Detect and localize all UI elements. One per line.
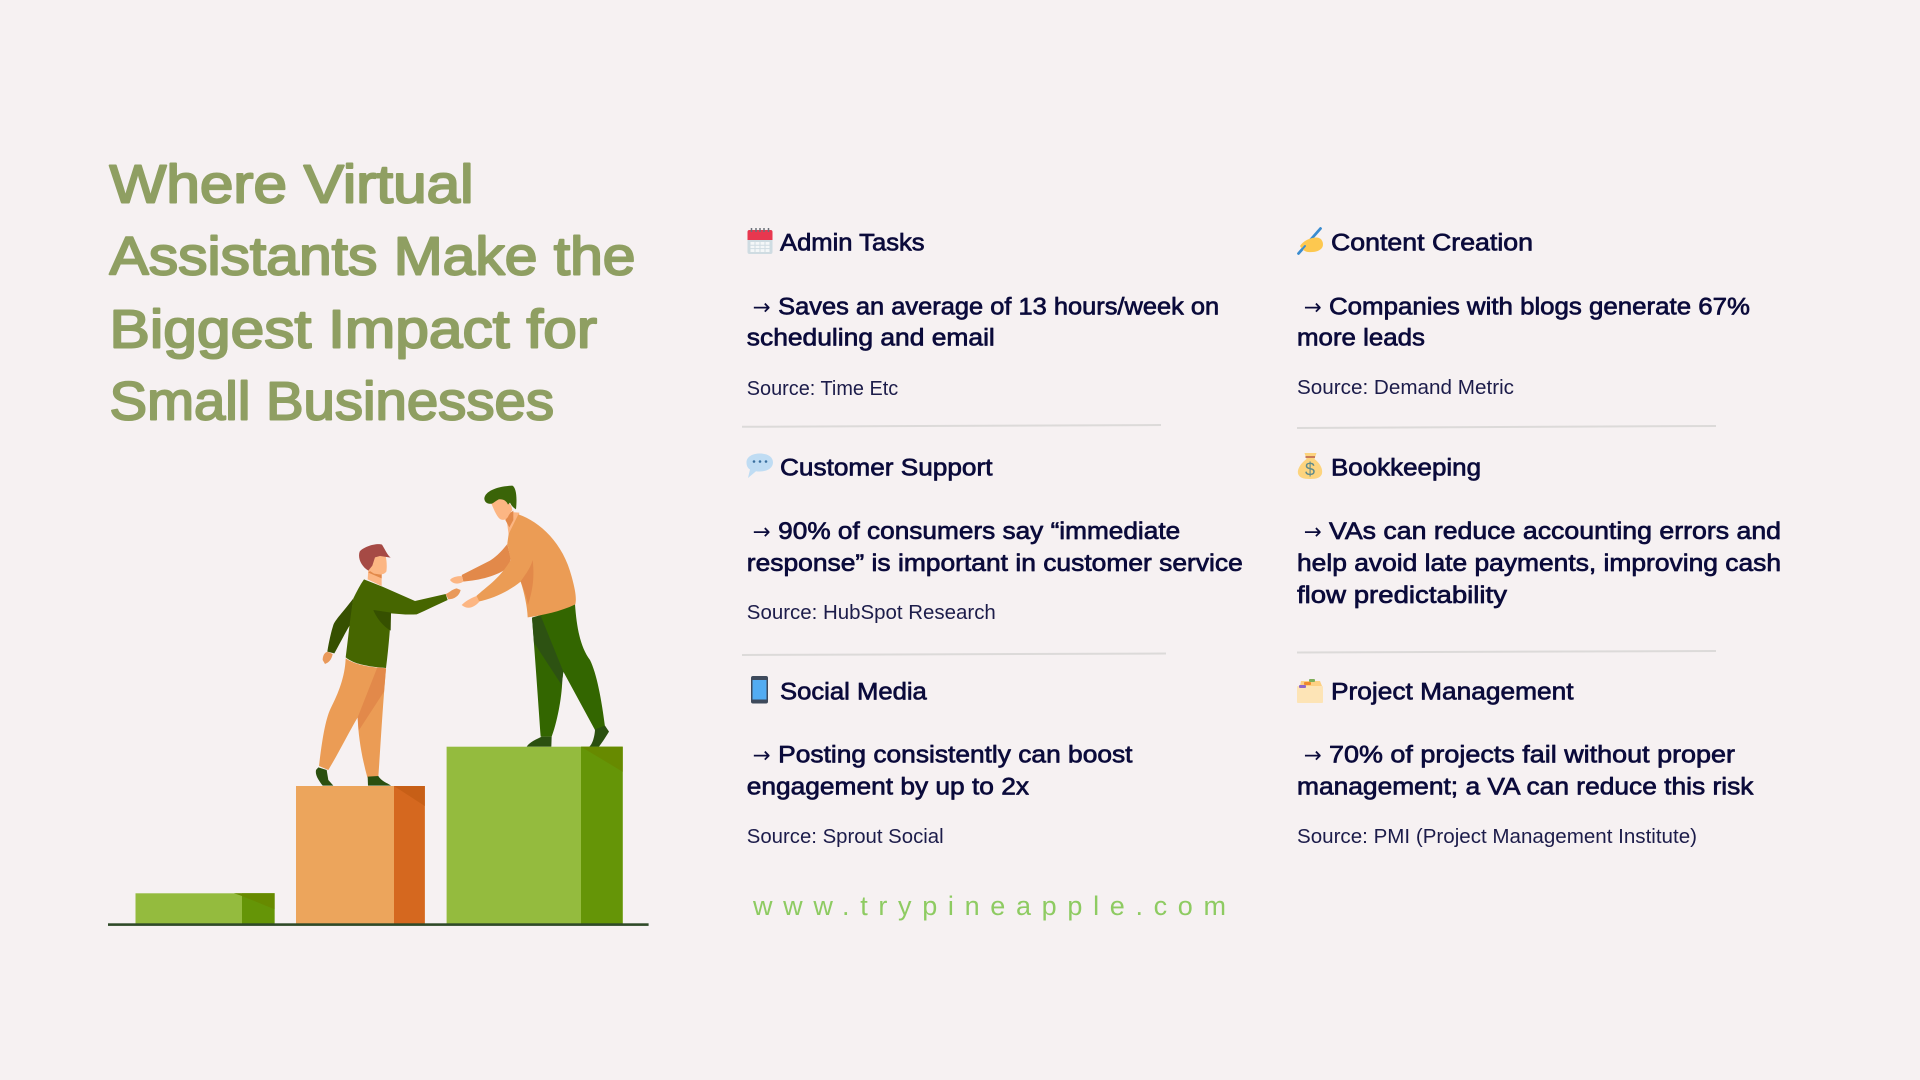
arrow: → bbox=[752, 520, 770, 545]
tall green block bbox=[447, 747, 623, 924]
arrow: → bbox=[1304, 296, 1322, 321]
person: tall man in orange sweater bbox=[450, 486, 609, 747]
stat text: help avoid late payments, improving cash bbox=[1297, 550, 1781, 577]
arrow: → bbox=[1304, 520, 1322, 545]
title: Where Virtual bbox=[110, 155, 474, 215]
heading: content creation: Content Creation bbox=[1331, 230, 1533, 257]
heading: project management: Project Management bbox=[1331, 678, 1574, 705]
stat text: flow predictability bbox=[1297, 582, 1507, 609]
icon: hand writing bbox=[1298, 228, 1323, 254]
icon: card file folder bbox=[1297, 679, 1323, 703]
source: Source: Demand Metric bbox=[1297, 377, 1514, 399]
heading: bookkeeping: Bookkeeping bbox=[1331, 455, 1481, 482]
ground line bbox=[108, 923, 649, 926]
title: Assistants Make the bbox=[110, 227, 636, 287]
stat text bbox=[747, 741, 1133, 800]
title: Biggest Impact for bbox=[110, 299, 597, 359]
stat text: Companies with blogs generate 67% bbox=[1329, 294, 1750, 321]
icon: calendar bbox=[748, 228, 772, 254]
icon: phone bbox=[751, 676, 768, 704]
person: small man in green sweater bbox=[316, 544, 461, 786]
heading: admin tasks: Admin Tasks bbox=[780, 230, 925, 257]
source: Source: HubSpot Research bbox=[747, 602, 996, 624]
panel: social media bbox=[747, 676, 1133, 848]
panel: admin tasks bbox=[747, 228, 1219, 400]
source: Source: PMI (Project Management Institute) bbox=[1297, 826, 1697, 848]
source: Source: Time Etc bbox=[747, 378, 898, 400]
stat text: more leads bbox=[1297, 325, 1425, 352]
stat text: scheduling and email bbox=[747, 325, 995, 352]
stat text: 90% of consumers say “immediate bbox=[778, 518, 1180, 545]
title bbox=[110, 155, 636, 431]
stat text: management; a VA can reduce this risk bbox=[1297, 773, 1755, 800]
stat text: Saves an average of 13 hours/week on bbox=[778, 294, 1219, 321]
orange block bbox=[296, 786, 425, 924]
panel: project management bbox=[1297, 678, 1755, 848]
stat text: 70% of projects fail without proper bbox=[1329, 741, 1735, 768]
arrow: → bbox=[752, 743, 770, 768]
arrow: → bbox=[752, 296, 770, 321]
icon: money bag: $ bbox=[1305, 460, 1315, 480]
heading: customer support: Customer Support bbox=[780, 455, 993, 482]
stat text bbox=[747, 518, 1243, 577]
panel: customer support bbox=[746, 454, 1243, 624]
arrow: → bbox=[1304, 743, 1322, 768]
source: Source: Sprout Social bbox=[747, 826, 944, 848]
stat text bbox=[1297, 741, 1755, 800]
heading: social media: Social Media bbox=[780, 678, 927, 705]
stat text bbox=[1297, 518, 1781, 609]
small green block bbox=[136, 893, 275, 924]
stat text: VAs can reduce accounting errors and bbox=[1329, 518, 1781, 545]
icon: speech bubble bbox=[746, 454, 773, 478]
website url: www.trypineapple.com bbox=[752, 891, 1226, 921]
stat text: engagement by up to 2x bbox=[747, 773, 1029, 800]
panel: content creation bbox=[1297, 228, 1750, 399]
icon: money bag bbox=[1298, 453, 1322, 480]
stat text: Posting consistently can boost bbox=[778, 741, 1133, 768]
stat text: response” is important in customer service bbox=[747, 550, 1243, 577]
panel: bookkeeping bbox=[1297, 453, 1781, 609]
illustration: two people on rising blocks bbox=[108, 486, 649, 926]
stat text bbox=[747, 294, 1219, 352]
stat text bbox=[1297, 294, 1750, 352]
title: Small Businesses bbox=[110, 371, 554, 431]
